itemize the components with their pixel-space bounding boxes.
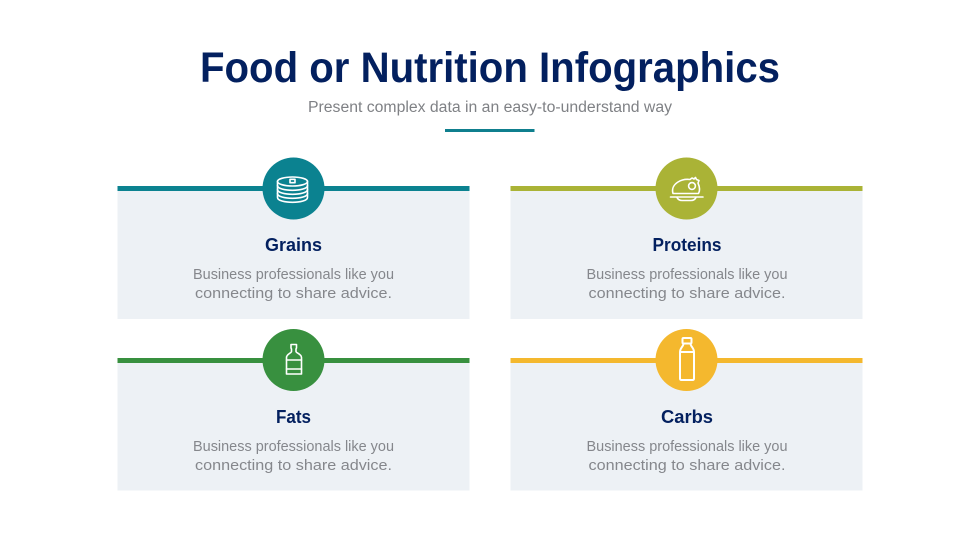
body text: carbs [586, 438, 788, 474]
subtitle: Present complex data in an easy-to-understand way [308, 99, 672, 116]
body text: carbs: Business professionals like you [586, 438, 788, 455]
title: Food or Nutrition Infographics [200, 44, 780, 92]
icon circle [656, 158, 718, 220]
panel top bar [118, 358, 470, 363]
icon: roast chicken on plate [670, 178, 703, 200]
panel: carbs [510, 329, 862, 490]
heading: proteins: Proteins [652, 235, 722, 255]
heading: carbs: Carbs [661, 407, 713, 427]
title underline [445, 129, 534, 132]
icon circle [262, 158, 324, 220]
heading: grains: Grains [265, 235, 322, 255]
panel top bar [118, 186, 470, 191]
icon: milk bottle [680, 338, 694, 380]
icon circle [262, 329, 324, 391]
panel: fats [118, 329, 470, 490]
body text: proteins [586, 266, 788, 302]
body text: fats: Business professionals like you [193, 438, 394, 455]
body text: grains [193, 266, 394, 302]
panel background [510, 358, 862, 490]
panel top bar [510, 186, 862, 191]
heading: fats: Fats [276, 407, 311, 427]
body text: fats [193, 438, 394, 474]
body text: grains: connecting to share advice. [195, 285, 392, 302]
panel: proteins [510, 158, 862, 319]
body text: proteins: Business professionals like you [586, 266, 788, 283]
panel background [118, 186, 470, 319]
body text: fats: connecting to share advice. [195, 457, 392, 474]
panel background [510, 186, 862, 319]
body text: carbs: connecting to share advice. [588, 457, 786, 474]
panel top bar [510, 358, 862, 363]
icon: oil bottle [286, 344, 302, 374]
body text: proteins: connecting to share advice. [588, 285, 786, 302]
icon circle [656, 329, 718, 391]
panel background [118, 358, 470, 490]
panel: grains [118, 158, 470, 319]
body text: grains: Business professionals like you [193, 266, 394, 283]
icon: stack of grain discs [278, 177, 308, 202]
